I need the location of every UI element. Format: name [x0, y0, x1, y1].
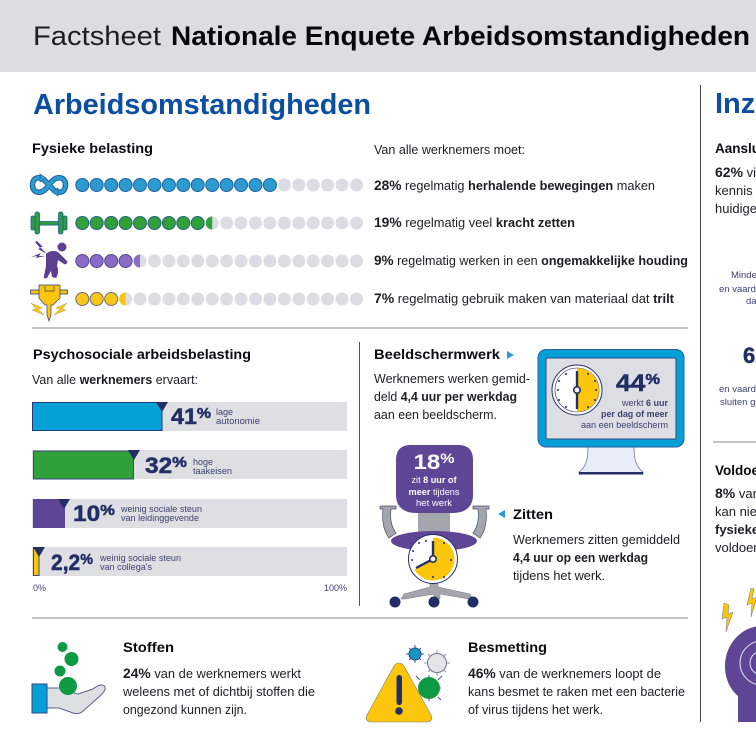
- right column: Voldoende text: [715, 463, 756, 555]
- dot row: 19%: [76, 216, 363, 230]
- section: Stoffen text: [122, 640, 315, 717]
- monitor with 44% callout: per dag of meer: [601, 409, 668, 420]
- icon: jackhammer: [30, 285, 68, 321]
- section: Beeldschermwerk text: Werknemers werken gemid-: [374, 371, 530, 386]
- label: 7%: 7% regelmatig gebruik maken van materiaal dat trilt: [374, 290, 675, 306]
- section: Beeldschermwerk text: Beeldschermwerk: [374, 347, 501, 362]
- section: Beeldschermwerk text: [374, 347, 530, 422]
- section: Stoffen text: Stoffen: [123, 640, 174, 655]
- bar: 41% lage autonomie: [32, 402, 347, 431]
- icon: hand with substances: [32, 642, 105, 714]
- bar: 41% lage autonomie: 41: [171, 404, 195, 429]
- bar chart: psychosocial load: [32, 402, 347, 593]
- section: Beeldschermwerk text: deld 4,4 uur per werkdag: [374, 389, 517, 404]
- label: 9%: 9% regelmatig werken in een ongemakkelijke houding: [374, 252, 688, 268]
- section: Stoffen text: ongezond kunnen zijn.: [123, 702, 247, 717]
- icon: repeating movement: [32, 174, 66, 196]
- bar: 41% lage autonomie: autonomie: [216, 416, 260, 427]
- section: Zitten text: tijdens het werk.: [513, 568, 605, 583]
- right column: Aansluiting text: [715, 141, 756, 216]
- bar: 10% leidinggevende: 10: [73, 501, 97, 526]
- dot row: 9%: [76, 254, 363, 268]
- bar: 2,2% collega's: van collega's: [100, 562, 152, 573]
- axis labels: 100%: [324, 583, 347, 593]
- section: Beeldschermwerk text: aan een beeldscherm.: [374, 407, 497, 422]
- section: Zitten text: Werknemers zitten gemiddeld: [513, 532, 680, 547]
- bar: 32% hoge taakeisen: taakeisen: [193, 466, 232, 477]
- bar: 2,2% collega's: %: [80, 551, 93, 568]
- header band: Factsheet: [33, 21, 162, 51]
- axis labels: 0%: [33, 583, 46, 593]
- bar: 2,2% collega's: weinig sociale steun: [99, 553, 181, 564]
- header band: [0, 0, 756, 72]
- office chair with 18% callout: zit 8 uur of: [412, 475, 457, 486]
- header band: Nationale Enquete Arbeidsomstandigheden: [171, 21, 750, 51]
- label: 19%: 19% regelmatig veel kracht zetten: [374, 214, 575, 230]
- icon: person with back pain: [31, 241, 67, 278]
- bar: 2,2% collega's: 2,2: [51, 550, 82, 575]
- bar: 32% hoge taakeisen: [32, 450, 347, 479]
- office chair with 18% callout: %: [440, 450, 455, 466]
- section: Zitten text: 4,4 uur op een werkdag: [513, 550, 648, 565]
- axis labels: [33, 583, 347, 593]
- heading: Fysieke belasting: Fysieke belasting: [32, 141, 153, 156]
- intro: Van alle werknemers moet: Van alle werknemers moet:: [374, 142, 525, 157]
- heading: Psychosociale arbeidsbelasting: Psychosociale arbeidsbelasting: [33, 347, 251, 362]
- bar: 10% leidinggevende: van leidinggevende: [121, 513, 199, 524]
- monitor with 44% callout: [538, 350, 684, 474]
- bar: 32% hoge taakeisen: 32: [145, 453, 169, 478]
- bar: 10% leidinggevende: %: [100, 502, 115, 519]
- section: Stoffen text: weleens met of dichtbij stoffen die: [122, 684, 315, 699]
- monitor with 44% callout: werkt 6 uur: [621, 398, 668, 409]
- bar: 10% leidinggevende: weinig sociale steun: [120, 504, 202, 515]
- dot row: 28%: [76, 178, 363, 192]
- section: Besmetting text: 46% van de werknemers loopt de: [468, 665, 661, 681]
- monitor with 44% callout: %: [645, 371, 660, 388]
- monitor with 44% callout: aan een beeldscherm: [581, 420, 668, 431]
- office chair with 18% callout: [380, 445, 489, 608]
- heading: Arbeidsomstandigheden: Arbeidsomstandigheden: [33, 89, 371, 121]
- office chair with 18% callout: het werk: [416, 498, 452, 509]
- icon: warning triangle with viruses: [366, 645, 450, 722]
- bar: 32% hoge taakeisen: %: [172, 454, 187, 471]
- section: Besmetting text: of virus tijdens het werk.: [468, 702, 603, 717]
- section: Besmetting text: [468, 640, 685, 717]
- office chair with 18% callout: 18: [414, 451, 437, 474]
- icon: clock at 6 hours: [552, 365, 602, 415]
- office chair with 18% callout: meer tijdens: [408, 487, 460, 498]
- section: Zitten text: [498, 507, 680, 583]
- right column: small captions: [719, 270, 756, 408]
- section: Besmetting text: Besmetting: [468, 640, 547, 655]
- bar: 10% leidinggevende: [32, 499, 347, 528]
- bar: 41% lage autonomie: lage: [216, 407, 233, 418]
- section: Zitten text: Zitten: [513, 507, 553, 522]
- section: Stoffen text: 24% van de werknemers werkt: [123, 665, 301, 681]
- bar: 2,2% collega's: [32, 547, 347, 576]
- icon: dumbbell: [31, 212, 67, 234]
- intro: Van alle werknemers ervaart: Van alle werknemers ervaart:: [32, 372, 198, 387]
- icon: clock at 4 hours: [408, 534, 458, 584]
- section: Besmetting text: kans besmet te raken met een bacterie: [468, 684, 685, 699]
- bar: 41% lage autonomie: %: [197, 405, 211, 422]
- icon: head with rings and lightning: [722, 588, 756, 722]
- dot row: 7%: [76, 292, 363, 306]
- label: 28%: 28% regelmatig herhalende bewegingen maken: [374, 177, 655, 193]
- bar: 32% hoge taakeisen: hoge: [193, 457, 213, 468]
- monitor with 44% callout: 44: [616, 370, 643, 397]
